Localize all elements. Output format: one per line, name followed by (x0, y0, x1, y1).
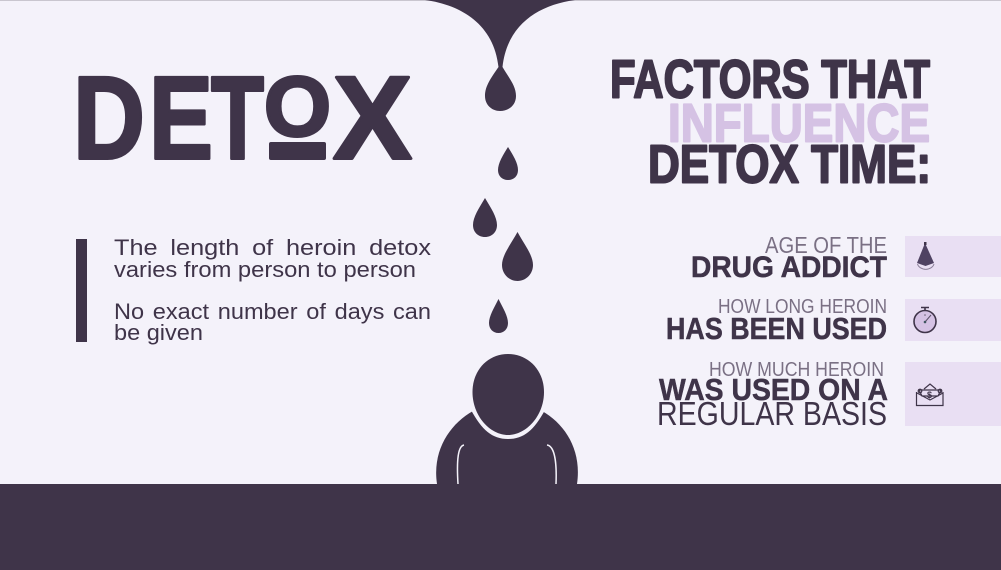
heading: factors that influence detox time: INFLUENCE (668, 94, 930, 154)
icon: party hat (917, 242, 934, 269)
intro text (114, 235, 431, 345)
title: DETOX: E (149, 52, 213, 184)
heading: factors that influence detox time (610, 50, 931, 194)
factor 1 label (691, 232, 887, 284)
title: DETOX: O (264, 60, 331, 154)
intro text: be given (114, 320, 203, 345)
icon: money envelope: $ (927, 390, 932, 400)
factor 2 label (666, 296, 887, 346)
title: DETOX: D (73, 52, 145, 184)
title: DETOX: T (211, 52, 264, 184)
intro text: varies from person to person (114, 257, 416, 282)
dripping liquid from top (425, 0, 575, 111)
factor 3 label: WAS USED ON A (659, 372, 888, 407)
factor 2 label: HAS BEEN USED (666, 311, 887, 346)
factor 3 label (657, 359, 888, 432)
icon: stopwatch (914, 308, 936, 332)
factor 2 label: HOW LONG HEROIN (718, 296, 887, 318)
factor 3: amount (657, 359, 1001, 432)
accent bar (76, 239, 87, 342)
title: DETOX (73, 52, 412, 184)
factor 1: age (691, 232, 1001, 284)
person silhouette (436, 354, 578, 484)
factor 3 label: REGULAR BASIS (657, 395, 887, 432)
intro text: The length of heroin detox (114, 235, 431, 260)
falling drops (473, 147, 533, 333)
factor 1 label: DRUG ADDICT (691, 251, 887, 284)
factor 3 label: HOW MUCH HEROIN (709, 359, 884, 381)
icon: money envelope (916, 384, 943, 406)
factor 2: duration (666, 296, 1001, 346)
title: DETOX: X (333, 52, 412, 184)
factor 1 label: AGE OF THE (765, 232, 887, 258)
bottom band (0, 484, 1001, 570)
heading: factors that influence detox time: DETOX TIME: (648, 134, 931, 194)
intro text: No exact number of days can (114, 299, 431, 324)
